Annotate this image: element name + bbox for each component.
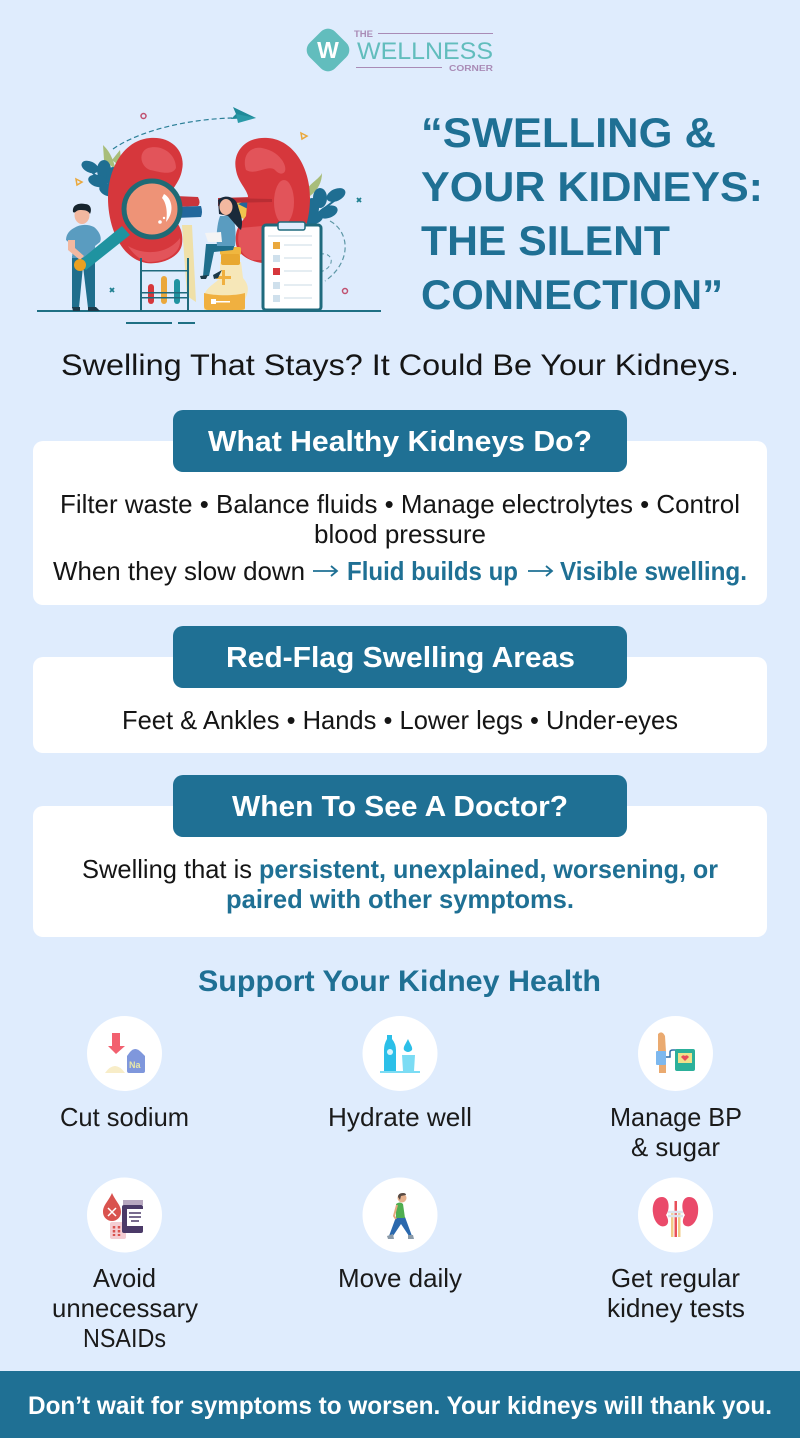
ureter and vessels bbox=[175, 196, 252, 302]
test tube rack bbox=[140, 258, 189, 311]
footer banner bbox=[0, 1371, 800, 1438]
panel: red-flag swelling areas bbox=[33, 626, 767, 753]
title: THE SILENT bbox=[421, 217, 670, 264]
illustration: doctors examining kidneys bbox=[37, 107, 381, 324]
heading pill: When To See A Doctor? bbox=[232, 791, 568, 823]
footer banner: Don’t wait for symptoms to worsen. Your kidneys will thank you. bbox=[28, 1392, 772, 1420]
label: Get regular bbox=[611, 1263, 740, 1293]
small decorative markers bbox=[76, 114, 361, 294]
label: Move daily bbox=[338, 1263, 462, 1293]
logo mark bbox=[303, 25, 353, 75]
heading pill: Red-Flag Swelling Areas bbox=[226, 642, 575, 674]
tip: manage bp and sugar bbox=[610, 1016, 742, 1162]
card body: blood pressure bbox=[314, 519, 486, 549]
panel: what healthy kidneys do bbox=[33, 410, 767, 605]
icon: blood pressure monitor bbox=[638, 1016, 713, 1091]
subtitle: Swelling That Stays? It Could Be Your Kidneys. bbox=[61, 349, 739, 382]
title: “SWELLING & bbox=[421, 109, 716, 156]
heading: support your kidney health: Support Your Kidney Health bbox=[198, 965, 601, 998]
logo wordmark: THE bbox=[354, 29, 373, 39]
title: YOUR KIDNEYS: bbox=[421, 163, 763, 210]
left kidney bbox=[108, 138, 183, 263]
icon: sodium down: Na bbox=[129, 1060, 141, 1070]
label bbox=[607, 1263, 745, 1323]
right kidney bbox=[225, 138, 310, 263]
label bbox=[52, 1263, 198, 1353]
label: & sugar bbox=[631, 1132, 720, 1162]
label: unnecessary bbox=[52, 1293, 198, 1323]
label bbox=[610, 1102, 742, 1162]
icon: walking person bbox=[362, 1178, 438, 1252]
label: NSAIDs bbox=[83, 1323, 166, 1353]
ground line bbox=[37, 310, 381, 324]
card body bbox=[33, 441, 767, 605]
heading pill: What Healthy Kidneys Do? bbox=[208, 426, 592, 458]
logo wordmark: CORNER bbox=[449, 64, 493, 73]
label: kidney tests bbox=[607, 1293, 745, 1323]
heading pill bbox=[173, 626, 627, 688]
card body bbox=[33, 806, 767, 937]
card body bbox=[33, 657, 767, 753]
panel: when to see a doctor bbox=[33, 775, 767, 937]
card body: When they slow down bbox=[53, 556, 305, 586]
logo: The Wellness Corner bbox=[303, 25, 493, 75]
card body: paired with other symptoms. bbox=[226, 884, 574, 914]
logo mark: W bbox=[317, 37, 339, 63]
tip: avoid nsaids bbox=[52, 1178, 198, 1353]
card body: Swelling that is bbox=[82, 854, 252, 884]
woman sitting on jar bbox=[200, 197, 242, 279]
label: Hydrate well bbox=[328, 1102, 472, 1132]
tip: move daily bbox=[338, 1178, 462, 1293]
title: CONNECTION” bbox=[421, 271, 723, 318]
leaves right bbox=[304, 173, 348, 226]
dashed flight path and paper plane bbox=[113, 107, 345, 281]
tip: get regular kidney tests bbox=[607, 1178, 745, 1323]
magnifying glass bbox=[74, 181, 180, 271]
label: Manage BP bbox=[610, 1102, 742, 1132]
card body: Visible swelling. bbox=[560, 556, 747, 586]
tip: cut sodium bbox=[60, 1016, 189, 1132]
logo wordmark: WELLNESS bbox=[357, 38, 493, 65]
medicine jar bbox=[204, 247, 248, 310]
clipboard checklist bbox=[263, 222, 321, 310]
heading pill bbox=[173, 775, 627, 837]
card body: persistent, unexplained, worsening, or bbox=[259, 854, 718, 884]
icon: water bottle and glass bbox=[362, 1016, 438, 1091]
logo wordmark bbox=[354, 29, 493, 73]
tip: hydrate well bbox=[328, 1016, 472, 1132]
man with magnifying glass bbox=[66, 204, 101, 311]
leaves left bbox=[80, 145, 122, 199]
icon: pill bottle and blood drop bbox=[87, 1178, 162, 1252]
label: Cut sodium bbox=[60, 1102, 189, 1132]
title bbox=[421, 109, 763, 318]
heading pill bbox=[173, 410, 627, 472]
label: Avoid bbox=[93, 1263, 156, 1293]
card body: Filter waste • Balance fluids • Manage electrolytes • Control bbox=[60, 489, 740, 519]
card body: Feet & Ankles • Hands • Lower legs • Under-eyes bbox=[122, 705, 678, 735]
card body: Fluid builds up bbox=[347, 556, 518, 586]
icon: pair of kidneys bbox=[638, 1178, 713, 1252]
